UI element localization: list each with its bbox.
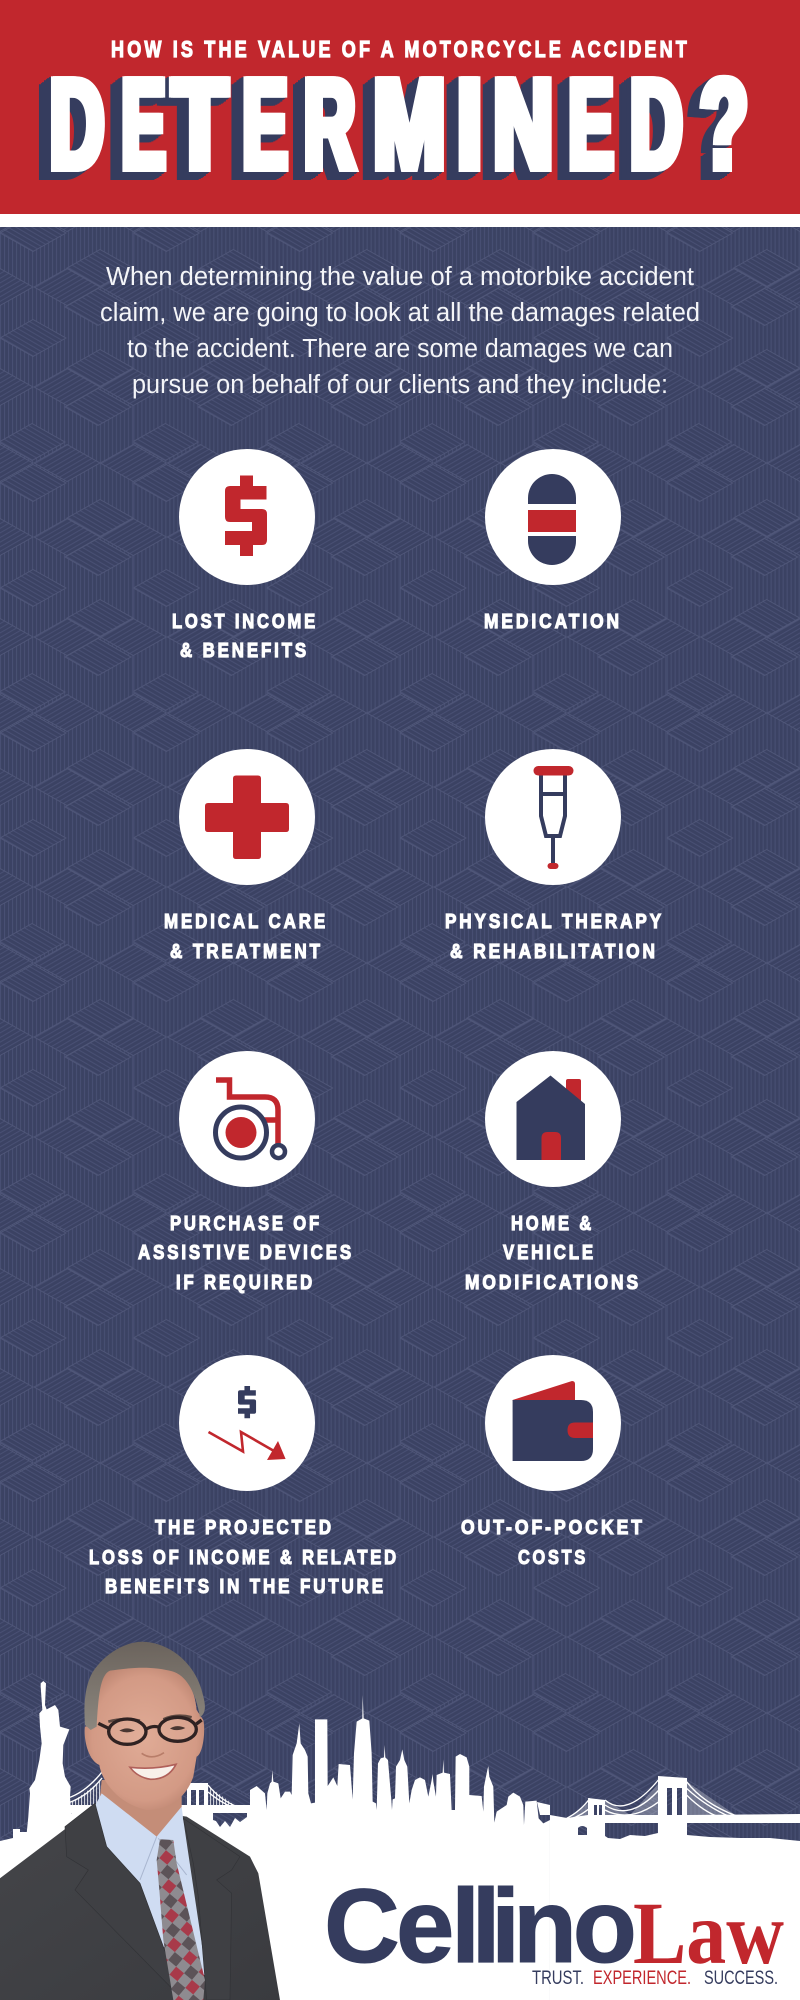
intro paragraph [100,263,700,399]
label: HOME & [511,1212,594,1235]
hair [84,1642,205,1730]
label: & TREATMENT [170,940,323,963]
panel: assistive devices [138,1051,354,1294]
title: E [569,52,613,196]
label: COSTS [518,1546,588,1569]
neck [100,1777,193,1838]
label: ASSISTIVE DEVICES [138,1241,354,1264]
wordmark Cellino: Cellino [324,1868,637,1985]
statue of liberty [27,1681,72,1843]
panel: medical care and treatment [164,749,328,963]
label: LOSS OF INCOME & RELATED [89,1546,399,1569]
label [461,1516,645,1569]
title: ? [700,52,748,196]
title: E [243,52,287,196]
label: IF REQUIRED [176,1271,315,1294]
title: E [122,52,165,196]
tagline: SUCCESS. [704,1968,778,1989]
title: T [172,52,227,196]
icon: house [485,1051,621,1187]
necktie [157,1839,205,2000]
label: THE PROJECTED [155,1516,334,1539]
white divider band [0,214,800,227]
smile [130,1764,176,1779]
label: BENEFITS IN THE FUTURE [105,1575,386,1598]
panel: home and vehicle modifications [465,1051,641,1294]
suit jacket [0,1803,280,2000]
label [164,910,328,963]
shirt [90,1793,207,1977]
icon: wallet [485,1355,621,1491]
icon: wheelchair [179,1051,315,1187]
label [138,1212,354,1294]
tagline: TRUST. [532,1968,584,1989]
intro paragraph: claim, we are going to look at all the damages related [100,299,700,327]
intro paragraph: pursue on behalf of our clients and they include: [132,371,668,399]
label: PHYSICAL THERAPY [445,910,664,933]
panel: medication [484,449,622,633]
left ground and bridge [0,1772,250,2000]
label: MODIFICATIONS [465,1271,641,1294]
tagline: EXPERIENCE. [593,1968,691,1989]
icon: pill [485,449,621,585]
label: PURCHASE OF [170,1212,322,1235]
label: & REHABILITATION [450,940,658,963]
label [89,1516,399,1598]
icon: dollar sign [179,449,315,585]
title: D [50,52,104,196]
intro paragraph: to the accident. There are some damages we can [127,335,673,363]
label [465,1212,641,1294]
nose shadow [142,1753,164,1757]
tagline [532,1968,778,1989]
header band [0,0,800,214]
title: N [494,52,553,196]
face [85,1667,204,1810]
logo: Cellino Law [324,1868,784,1989]
title: R [304,52,355,196]
panel: physical therapy and rehabilitation [445,749,664,963]
panel: out-of-pocket costs [461,1355,645,1569]
label [445,910,664,963]
label: LOST INCOME [172,610,318,633]
panel: lost income and benefits [172,449,318,662]
title: M [373,52,445,196]
title: D [630,52,682,196]
title [50,52,748,196]
icon: crutch [485,749,621,885]
collar fold [140,1837,187,1880]
label: MEDICATION [484,610,622,633]
title: I [457,52,482,196]
intro paragraph: When determining the value of a motorbike accident [106,263,694,291]
jacket lapels [65,1803,240,2000]
portrait of attorney [0,1642,280,2000]
eyebrows [108,1716,192,1722]
footer city skyline [0,1681,800,2000]
label: & BENEFITS [180,639,309,662]
label: MEDICAL CARE [164,910,328,933]
icon: falling dollar [179,1355,315,1491]
panel: projected loss of income [89,1355,399,1598]
label: VEHICLE [503,1241,596,1264]
eyes [119,1726,185,1732]
icon: medical cross [179,749,315,885]
midtown towers [250,1695,550,2000]
brooklyn and manhattan bridges [537,1776,800,2000]
label: OUT-OF-POCKET [461,1516,645,1539]
glasses [98,1717,202,1744]
wordmark Law: Law [633,1885,784,1983]
label [172,610,318,662]
